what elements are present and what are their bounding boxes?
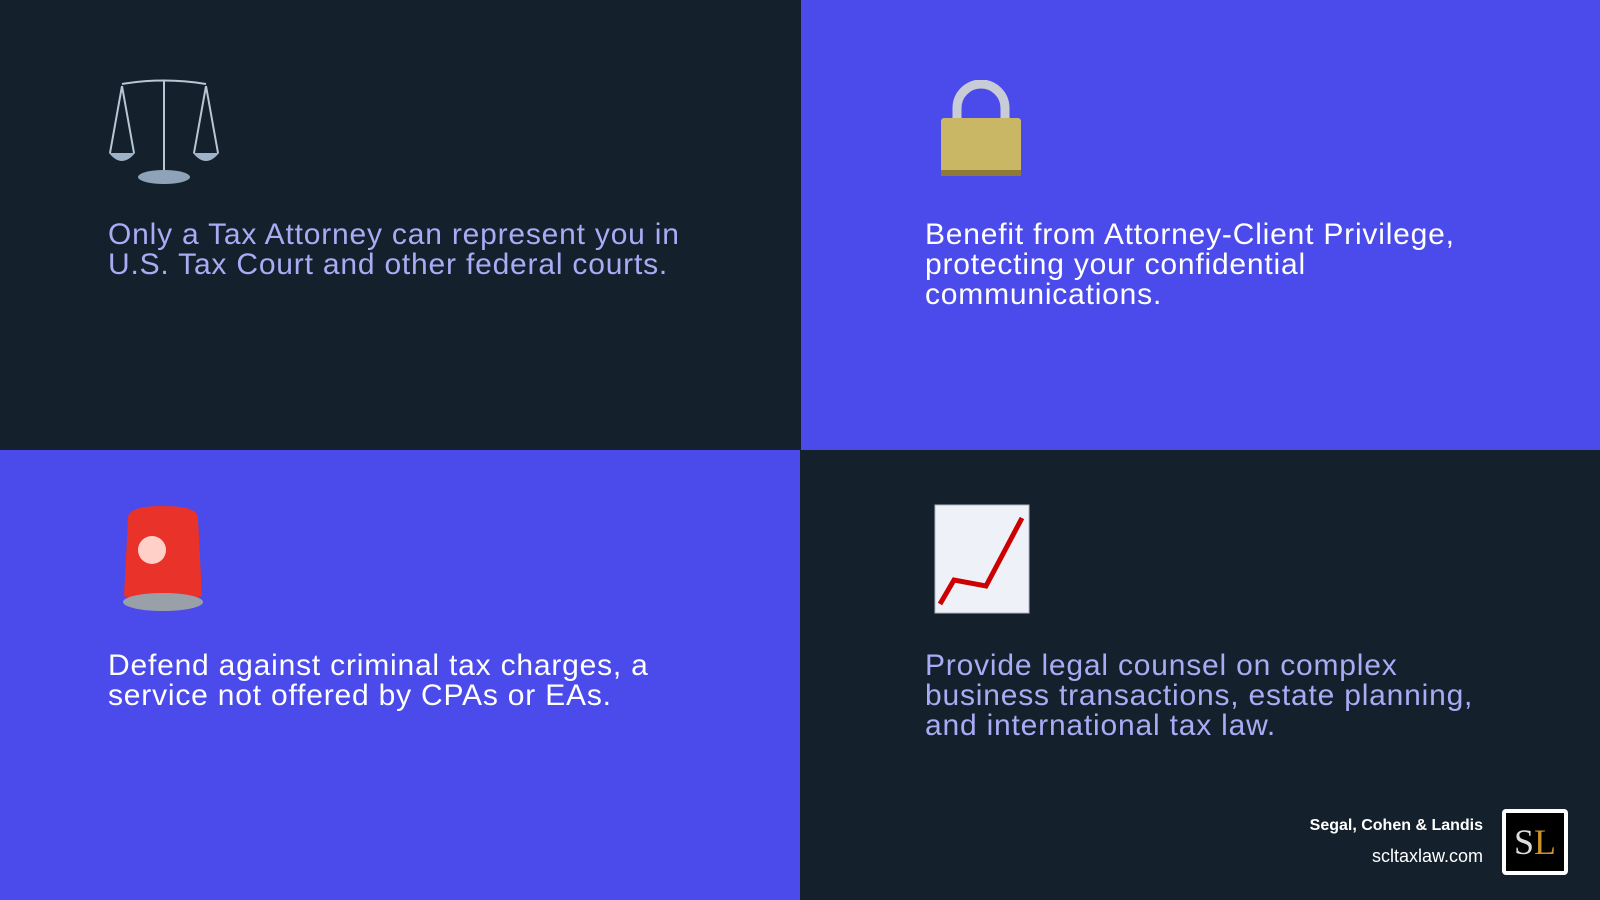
panel: criminal defense (0, 450, 800, 900)
icon: siren (123, 506, 203, 611)
logo: SL (1514, 822, 1556, 862)
text: protecting your confidential (925, 248, 1306, 281)
text: Defend against criminal tax charges, a (108, 649, 649, 682)
website: scltaxlaw.com (1372, 846, 1483, 866)
text (108, 649, 649, 712)
icon: chart (934, 504, 1030, 614)
icon: lock (941, 80, 1021, 176)
text: Only a Tax Attorney can represent you in (108, 218, 680, 251)
text: Provide legal counsel on complex (925, 649, 1398, 682)
text: communications. (925, 278, 1162, 311)
logo (1502, 809, 1568, 875)
panel: legal counsel (801, 450, 1600, 900)
text: business transactions, estate planning, (925, 679, 1473, 712)
panel: privilege (801, 0, 1600, 450)
brand block (1310, 809, 1568, 875)
text (925, 649, 1473, 742)
text (925, 218, 1455, 311)
text: service not offered by CPAs or EAs. (108, 679, 612, 712)
text (108, 218, 680, 281)
panel: tax court (0, 0, 800, 450)
icon: scales (109, 80, 219, 184)
text: and international tax law. (925, 709, 1276, 742)
text: U.S. Tax Court and other federal courts. (108, 248, 668, 281)
brand name: Segal, Cohen & Landis (1310, 817, 1483, 834)
text: Benefit from Attorney-Client Privilege, (925, 218, 1455, 251)
